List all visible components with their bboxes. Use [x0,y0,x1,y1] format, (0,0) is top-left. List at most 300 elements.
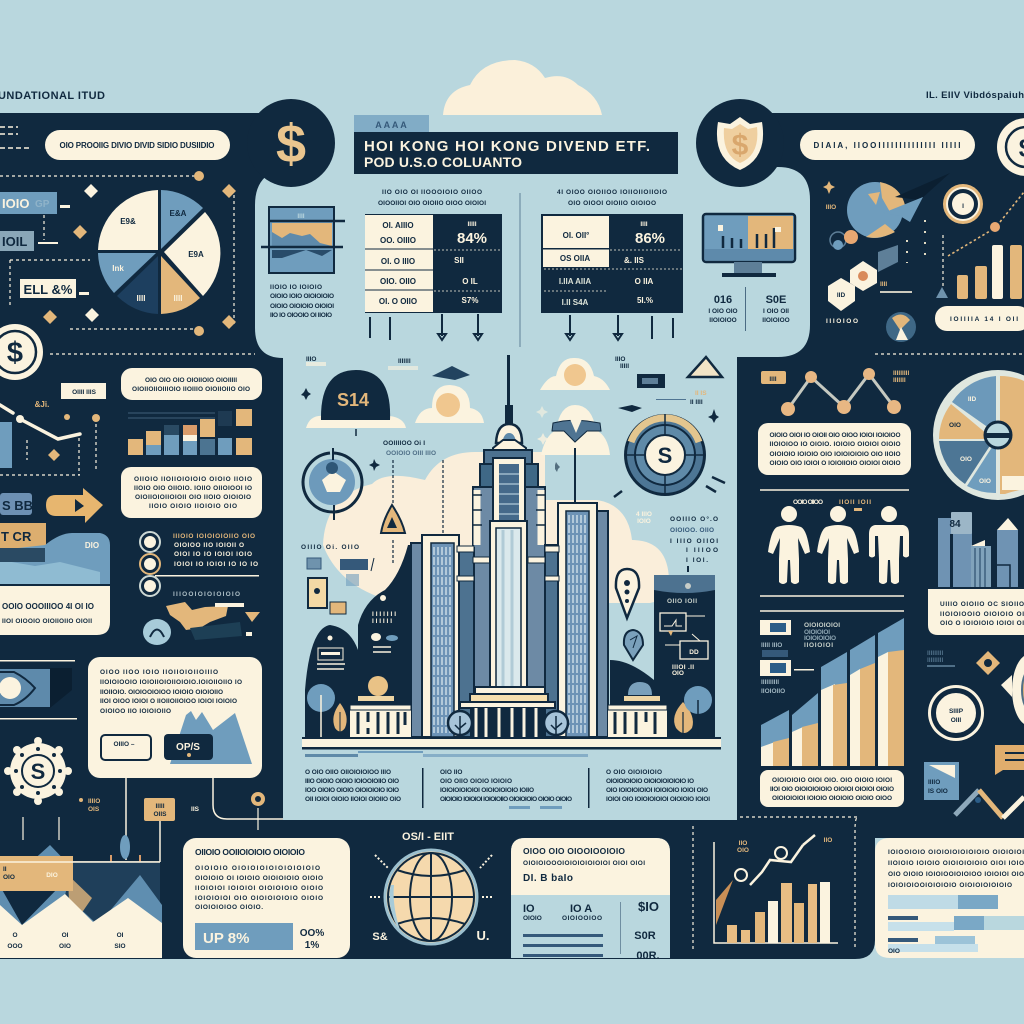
bottom text columns: OIOIOIOIOIO OIOIOIOIOIOIO IO [606,778,694,785]
text card with mountains [88,657,262,778]
bottom text columns: IOIOI OIO IOIOIOIOIOI OIOIOIO IOIOI [606,796,710,803]
small icons [825,230,916,342]
mountain chart: OIO [59,943,71,950]
star and label: IIIO [826,204,836,211]
faded table: IIIIIIIII [927,657,943,664]
table 1: OIO. OIIO [380,277,416,286]
text card [760,770,904,807]
icon list: OIOIOO IIO IOIOII O [174,542,244,549]
small icons: IIIOIOO [826,318,858,325]
text card C [875,838,1024,958]
caption: IIOIO IO IOIOIO [270,284,322,291]
dark panel details: IIIOI .II [672,664,694,671]
chart legend: IIOIOIIO [761,688,785,695]
area bar chart [761,618,904,766]
bottom text columns: O OIO OIOIOIOIO [606,769,662,776]
icon: shield with dollar: $ [732,129,749,162]
zigzag mountains [955,790,1024,818]
bottom text columns: O OIO OIIO OIIOIOIOIOO IIIO [305,769,391,776]
bottom text columns: OIO OIIO OIOIO IOIOIO [440,778,512,785]
text card B: IO A [570,903,592,915]
right table heading: OIO OIOOI OIOIIO OIOIOO [568,200,656,207]
stats: S0E [766,294,786,306]
callout card: OIO OIO OIO OIOIIOIO OIOIIIII [145,377,237,384]
line chart [781,368,901,416]
dark hills [305,545,715,737]
text card: OIO O IOIOIOIO IOIOI OI [940,620,1024,627]
mountain chart: OI [117,932,124,939]
text card B: OIOIOIOOOIOIOIOIOIOIOI OIOI OIOI [523,860,645,867]
faded table: IIIIIIIII [927,650,943,657]
text card with mountains: OIIIO – [114,741,135,748]
text card with mountains: IIOI OIOO IOIOI O IIOIIOIIOIOO IOIOI IOIOIO [100,698,237,705]
chart with bars: OIO [737,847,749,854]
text card with mountains: OP/S [176,742,200,753]
left table heading: IIO OIO OI IIOOOIOIO OIIOO [382,189,482,196]
bottom text columns: IIIO OIOIO OIOIO IOIOOIOIIO OIO [305,778,399,785]
icon: shield with dollar [717,117,763,170]
text card B [511,838,670,962]
table 1: O IL [462,277,478,286]
coin target: I [962,203,964,210]
data tags: GP [35,199,50,210]
callout card: OIOIIOIIOIIIOIO IIOIIIO OIOIIOIIO OIO [132,386,250,393]
data tags: IOIO [2,196,29,211]
cloud top [443,60,602,115]
small device: IIIO [615,356,625,363]
text card with mountains: IIOIIOIO. OIOIOOIOIOO IOIOIO OIOIOIIO [100,689,223,696]
caption: OIOIO IOIO OIOIOIOIO [270,293,334,300]
left hill details [317,595,398,669]
pill heading: OIO PROOIIG DIVIO DIVID SIDIO DUSIIDIO [60,141,214,150]
chart legend: OIOIOIOIOI [804,622,840,629]
ground strip [302,737,721,757]
title block [354,115,678,174]
globe pie [847,182,905,238]
caption: IIIIIIIII [893,370,909,377]
data tags: ELL &% [24,282,73,297]
table 2: I.II S4A [562,298,589,307]
icon list: OIOI IO IO IOIOI IOIO [174,551,252,558]
table 1 [365,214,502,313]
arrow tag [46,488,103,523]
dark panel details [660,583,708,677]
table 2 [541,214,683,313]
table 1: OI. O IIIO [381,257,415,266]
right pins and text: I IIIO OIIOI [670,538,718,545]
panel: bottom band content [0,817,1024,962]
right low building [608,682,667,737]
panel: left column contents [0,368,283,862]
left table heading: OIOOIIOI OIO OIOIIO OIOO OIOIOI [378,200,486,207]
mountain chart: SIO [114,943,126,950]
divider [519,193,521,347]
right pins and text: I IOI. [686,557,708,564]
icon: framed chart [261,207,345,273]
text card C: OIO OIOIO IOIOIOOIOIOIOO IOIOIOI OIO [888,871,1024,878]
text card A: IOIOIOIOI OIO OIOIOIOIOIO OIOIO [195,895,323,902]
top column [493,458,525,522]
pie chart: E&A [170,209,187,218]
text card with mountains: IIOIOIOOIO IOIOIIOIOIIOIOIO.IOIOIIOIIO IO [100,679,242,686]
diamonds and dots [43,171,236,336]
chart legend: IIIIIIIIII [761,679,779,686]
mountain chart: DIO [46,872,58,879]
star and label [823,181,836,211]
short labels top-left [0,127,30,148]
bottom text columns: IOO OIOIO OIOIO OIOIOIOIO IOIO [305,787,399,794]
text card with mountains: OIOIOO IIO IOIOIOIIO [100,708,171,715]
blue area shape [0,533,110,584]
speech bubble [995,745,1024,775]
icon: dollar circle: $ [276,114,306,174]
plinth [475,687,545,694]
table 1: IIIII [467,221,477,228]
tag [761,371,786,384]
tag: IIII [769,376,777,383]
left tower [411,543,424,737]
dashed leaders and tag [381,460,443,565]
text card C: OIO [888,948,900,955]
text card: OIOIOIO IOIOIO OIO IOIOIOIOIO OIO IIOIO [770,451,900,458]
text card A: 1% [305,940,319,951]
people labels: OOIO OIIOO [793,499,823,506]
tan tag: IIS [191,806,200,813]
tag: OIIII IIIS [72,389,97,396]
dark panel details: DD [689,649,699,656]
panel: right column content [758,368,1024,818]
text card [758,423,911,475]
text card C: IOIOIOIOOIOIOIOIO OIOIOIOIOIOIO [888,882,1012,889]
diamond and medallion [976,651,1024,726]
pill heading [45,130,230,160]
chart legend: IOIOIOIOIO [804,635,836,642]
text card: OIOIOIOIOI IOIOIO OIOIOIO OIOIO OIOO [772,795,892,802]
text card: IIOI OIO OIOIOIOIOIO OIOIOI OIOIOI OIOIO [770,786,894,793]
header label right: IL. EIIV Vibdóspaiuh [926,90,1024,101]
stats: IIOIOIOO [762,317,790,324]
blue card [924,762,959,800]
small device: IIIII [620,363,629,370]
pie chart [98,190,220,314]
right tower [596,511,608,737]
bar chart [957,245,1022,299]
pill label [935,306,1024,331]
text card: OIOIIOIOIIOIOII OIO IIOIO OIOIOIO [135,494,251,501]
sky clouds: S14 [337,390,369,410]
chart with bars: IIO [824,837,832,844]
pie chart: Ink [112,264,124,273]
text card B: OIOIO [523,915,542,922]
wheel chart: OIO [949,422,961,429]
table 2 arrows [566,315,673,340]
dark panel details: OIO [672,670,684,677]
big cloud [323,452,669,603]
mountain chart [0,835,162,958]
pie chart: IIII [174,294,182,303]
back tiers [484,450,532,540]
labels: S BB [2,498,33,513]
blue card: IIIIO [928,779,940,786]
icon: dollar coin [0,324,43,380]
table 2: 86% [635,230,665,247]
stats: 016 [714,294,732,306]
trees [307,684,712,745]
table 2: 5I.% [637,296,653,305]
title block: POD U.S.O COLUANTO [364,154,522,170]
left small labels and frames [301,544,374,614]
text card A: UP 8% [203,930,249,947]
icon list: IIIOOIOIOIOIOIO [173,591,240,598]
circle badge: OIII [951,717,961,724]
tan tag: OIIS [153,811,167,818]
bottom text columns: OIO IIO [440,769,462,776]
table 2: OI. OII° [563,231,589,240]
text card B: OIOIOOIOO [562,915,602,922]
wing trims [457,546,559,581]
bottom text columns: OIO IOIOIOIOIOI IOIOIOIO IOIOI OIO [606,787,708,794]
small decorations [301,356,560,472]
caption [270,284,334,319]
text card: OIIOIO IIOIIOIOIOIO OIOIO IIOIO [134,476,252,483]
text card with mountains: OIOO IIOO IOIO IIOIIOIOIIOIIIO [100,669,218,676]
dark panel details: OIIO IOII [667,598,697,605]
table 2: &. IIS [624,256,645,265]
chart legend: IIOIOIOI [804,642,833,649]
icon list: IIIOIO IOIOIOIOIIO OIO [173,533,255,540]
wheel chart [933,370,1024,500]
paper plane [883,173,950,222]
text card B: $IO [638,899,659,914]
icons: people [768,506,909,584]
connector lines [0,778,283,862]
mountain chart: OI [62,932,69,939]
right pins and text: 4 IIIO [636,511,652,518]
gauge dollar: S [658,443,672,468]
data tags: IOIL [2,234,27,249]
pie chart: E9A [188,250,204,259]
sky clouds [306,358,610,455]
wheel chart: OIO [979,478,991,485]
label [383,440,436,457]
stats [708,287,790,331]
text card: OIOIO OIOI IO OIOII OIO OIOO IOIOI IOIOIOO [770,432,900,439]
coin target [943,184,983,224]
icon: gear with dollar [4,737,72,805]
tag [61,383,106,399]
text card [0,586,110,635]
left low building [350,676,411,737]
globe: U. [476,928,490,943]
callout card [121,368,262,400]
text card B: 00R. [636,950,660,962]
right pins and text: I IIIOO [686,547,718,554]
text card [121,467,262,518]
table 2: OS OIIA [560,254,590,263]
text card A: OO% [300,928,324,939]
text card B: S0R [634,930,656,942]
globe [370,831,492,944]
small icons: IIII [880,281,887,288]
panel: upper-left dark panel contents [0,127,255,380]
caption: IIIIIII [893,377,906,384]
text card A: IIOIOIOI IOIOIOI OIOIOIOIO OIOIO [195,885,323,892]
table 2: I.IIA AIIA [559,277,591,286]
text card A [183,838,350,958]
text card: UIIIO OIOIIO OC SIOIIO [940,601,1024,608]
icon: framed chart: IIII [297,213,305,220]
small caption: IIIIO [88,798,100,805]
buildings: 84 [949,519,961,530]
text card: IIOIOIOOIO OIOIOIO OI [940,611,1024,618]
icon: coin [997,118,1024,176]
right pins and text [616,511,718,660]
small decorations: IIIIIII [398,358,411,365]
panel: center top content [261,189,795,347]
text card B: OIOO OIO OIOOIOOIOIO [523,846,625,856]
chart with bars [693,817,858,950]
caption: OIOIO OIOIOIO OIOIOI [270,303,334,310]
table 2: IIII [640,221,648,228]
right pins and text: OIOIOO. OIIO [670,527,714,534]
small device: II IS [695,390,707,397]
chart legend: IIIII IIIO [761,642,782,649]
header label left: UNDATIONAL ITUD [0,90,105,102]
dotted trend [907,192,1024,298]
panel: center skyline scene [301,355,725,809]
right pins and text: IOIO [637,518,651,525]
text card: IIOIOIOO IO OIOIO. IOIOIO OIOIOI OIOIO [770,441,900,448]
left hill details: IIIIII [372,618,392,625]
text card C: IOIOOIOIO OIOIOIOIOIOIOIO OIOIOIOI [888,849,1024,856]
chart with bars: IIO [739,840,747,847]
white ticks [23,817,59,840]
center column [490,521,527,688]
small caption [79,798,100,813]
table 1: OI. AIIIO [382,221,414,230]
text card: IIOIO OIO OIIOIO. IOIIO OIIOIOOI IO [134,485,252,492]
table 1: OO. OIIIO [380,236,416,245]
people labels [793,499,871,511]
warning triangle [688,357,722,377]
text card [928,589,1024,635]
text card: OIOIOIOIO OIOI OIO. OIO OIOIO IOIOI [772,777,892,784]
small icons: IID [837,292,845,299]
round trees by tower [448,711,568,737]
spire [507,355,510,410]
table 1: OI. O OIIO [379,297,417,306]
text card: IIOIO OIOIO IIOIOIO OIO [149,503,237,510]
blue device [0,660,77,720]
tan dot [251,792,265,830]
text card: OIOIO OIO IOIOI O IOIOIIOIO OIOIOI OIOIO [770,460,900,467]
tower [411,355,608,737]
pill heading: DIAIA, IIOOIIIIIIIIIIIIII IIIII [814,141,960,150]
right table heading: 4I OIOO OIOIIOO IOIIOIIOIIOIO [557,189,667,196]
pill label: IOIIIIA 14 I OII [950,316,1018,323]
mountain chart: II [3,866,7,873]
bar chart [128,409,252,455]
pill heading [800,130,975,160]
title block: A A A A [375,120,407,130]
text card: OOIO OOOIIIOO 4I OI IO [2,602,94,611]
globe: S& [372,931,388,943]
left small labels and frames: OIIIO Oi. OIIO [301,544,359,551]
caption: IIO IO OIOOIO OI IIOIO [270,312,332,319]
gauge dollar [614,414,725,497]
bottom text columns: IOIOIOIOIOIOI OIOIOIOIOIO IOIIO [440,787,534,794]
small device: II IIII [690,399,703,406]
text card: IIOI OIOOIO OIOIIOIIO OIOII [2,618,92,625]
target icon [303,448,362,520]
circle badge: SIIIP [949,708,964,715]
table 1: S7% [462,296,478,305]
dashed line [875,353,1024,355]
title block: HOI KONG HOI KONG DIVEND ETF. [364,138,650,155]
buildings [938,512,1018,587]
table 1: 84% [457,230,487,247]
dashed guides [0,176,255,354]
people labels: IIOII IOII [839,499,871,506]
tan tag [144,798,200,821]
text card A: OIIOIO OOIIOIOIOIO OIOIOIO [195,847,305,857]
small device [615,356,719,423]
text card C: IIOIOIO IOIOIO OIOIOIOIOIO OIOI IOIO [888,860,1024,867]
globe: OS/I - EIIT [402,831,454,843]
text card A: OIOIOIOIOO OIOIO. [195,904,263,911]
bottom text columns: OIOIOIO IOIOIOI IOIOIOIIO OIOIOIOIO OIOIO OIOIO [440,796,572,803]
left table heading [378,189,486,207]
table 1 arrows [370,314,482,340]
label: OOIOIO OIII IIIO [386,450,436,457]
table 2: O IIA [635,277,654,286]
line chart: &Ji. [35,400,49,409]
small caption: OIS [88,806,100,813]
bottom text columns [305,768,710,809]
monitor chart [703,214,795,277]
right pins and text: OOIIIO O°.O [670,515,718,523]
labels: T CR [1,529,32,544]
labels [0,493,46,548]
line chart [0,400,100,475]
pie chart: E9& [120,217,136,226]
world map [143,602,260,645]
small decorations: IIIO [306,356,316,363]
mountain chart: OIO [3,874,15,881]
mountain chart: O [12,932,18,939]
table 1: SII [454,256,464,265]
wheel chart: OIO [960,456,972,463]
icon list: IOIOI IO IOIOI IO IO IO [174,561,258,568]
bottom text columns: OII IOIOI OIOIO IIOIOI OIOIIO OIO [305,796,401,803]
icon: gear with dollar: S [31,759,45,784]
chart legend: OIOIOIOI [804,629,830,636]
tan tag: IIIII [155,803,165,810]
blue area shape: DIO [85,541,99,550]
stats: IIOIOIOO [709,317,737,324]
circle badge [928,685,984,741]
stats: I OIO OII [763,308,789,315]
label: OOIIIIOO Oi I [383,440,425,447]
text card B: IO [523,903,535,915]
emblem on cloud [552,419,601,502]
icon list [140,532,259,598]
text card A: OIOIOIO OIOIOIOIOIOIOIOIOIO [195,865,320,872]
mountain chart: OOO [7,943,23,950]
divider [760,490,909,611]
pie chart: IIII [137,294,145,303]
faded table [927,650,955,667]
